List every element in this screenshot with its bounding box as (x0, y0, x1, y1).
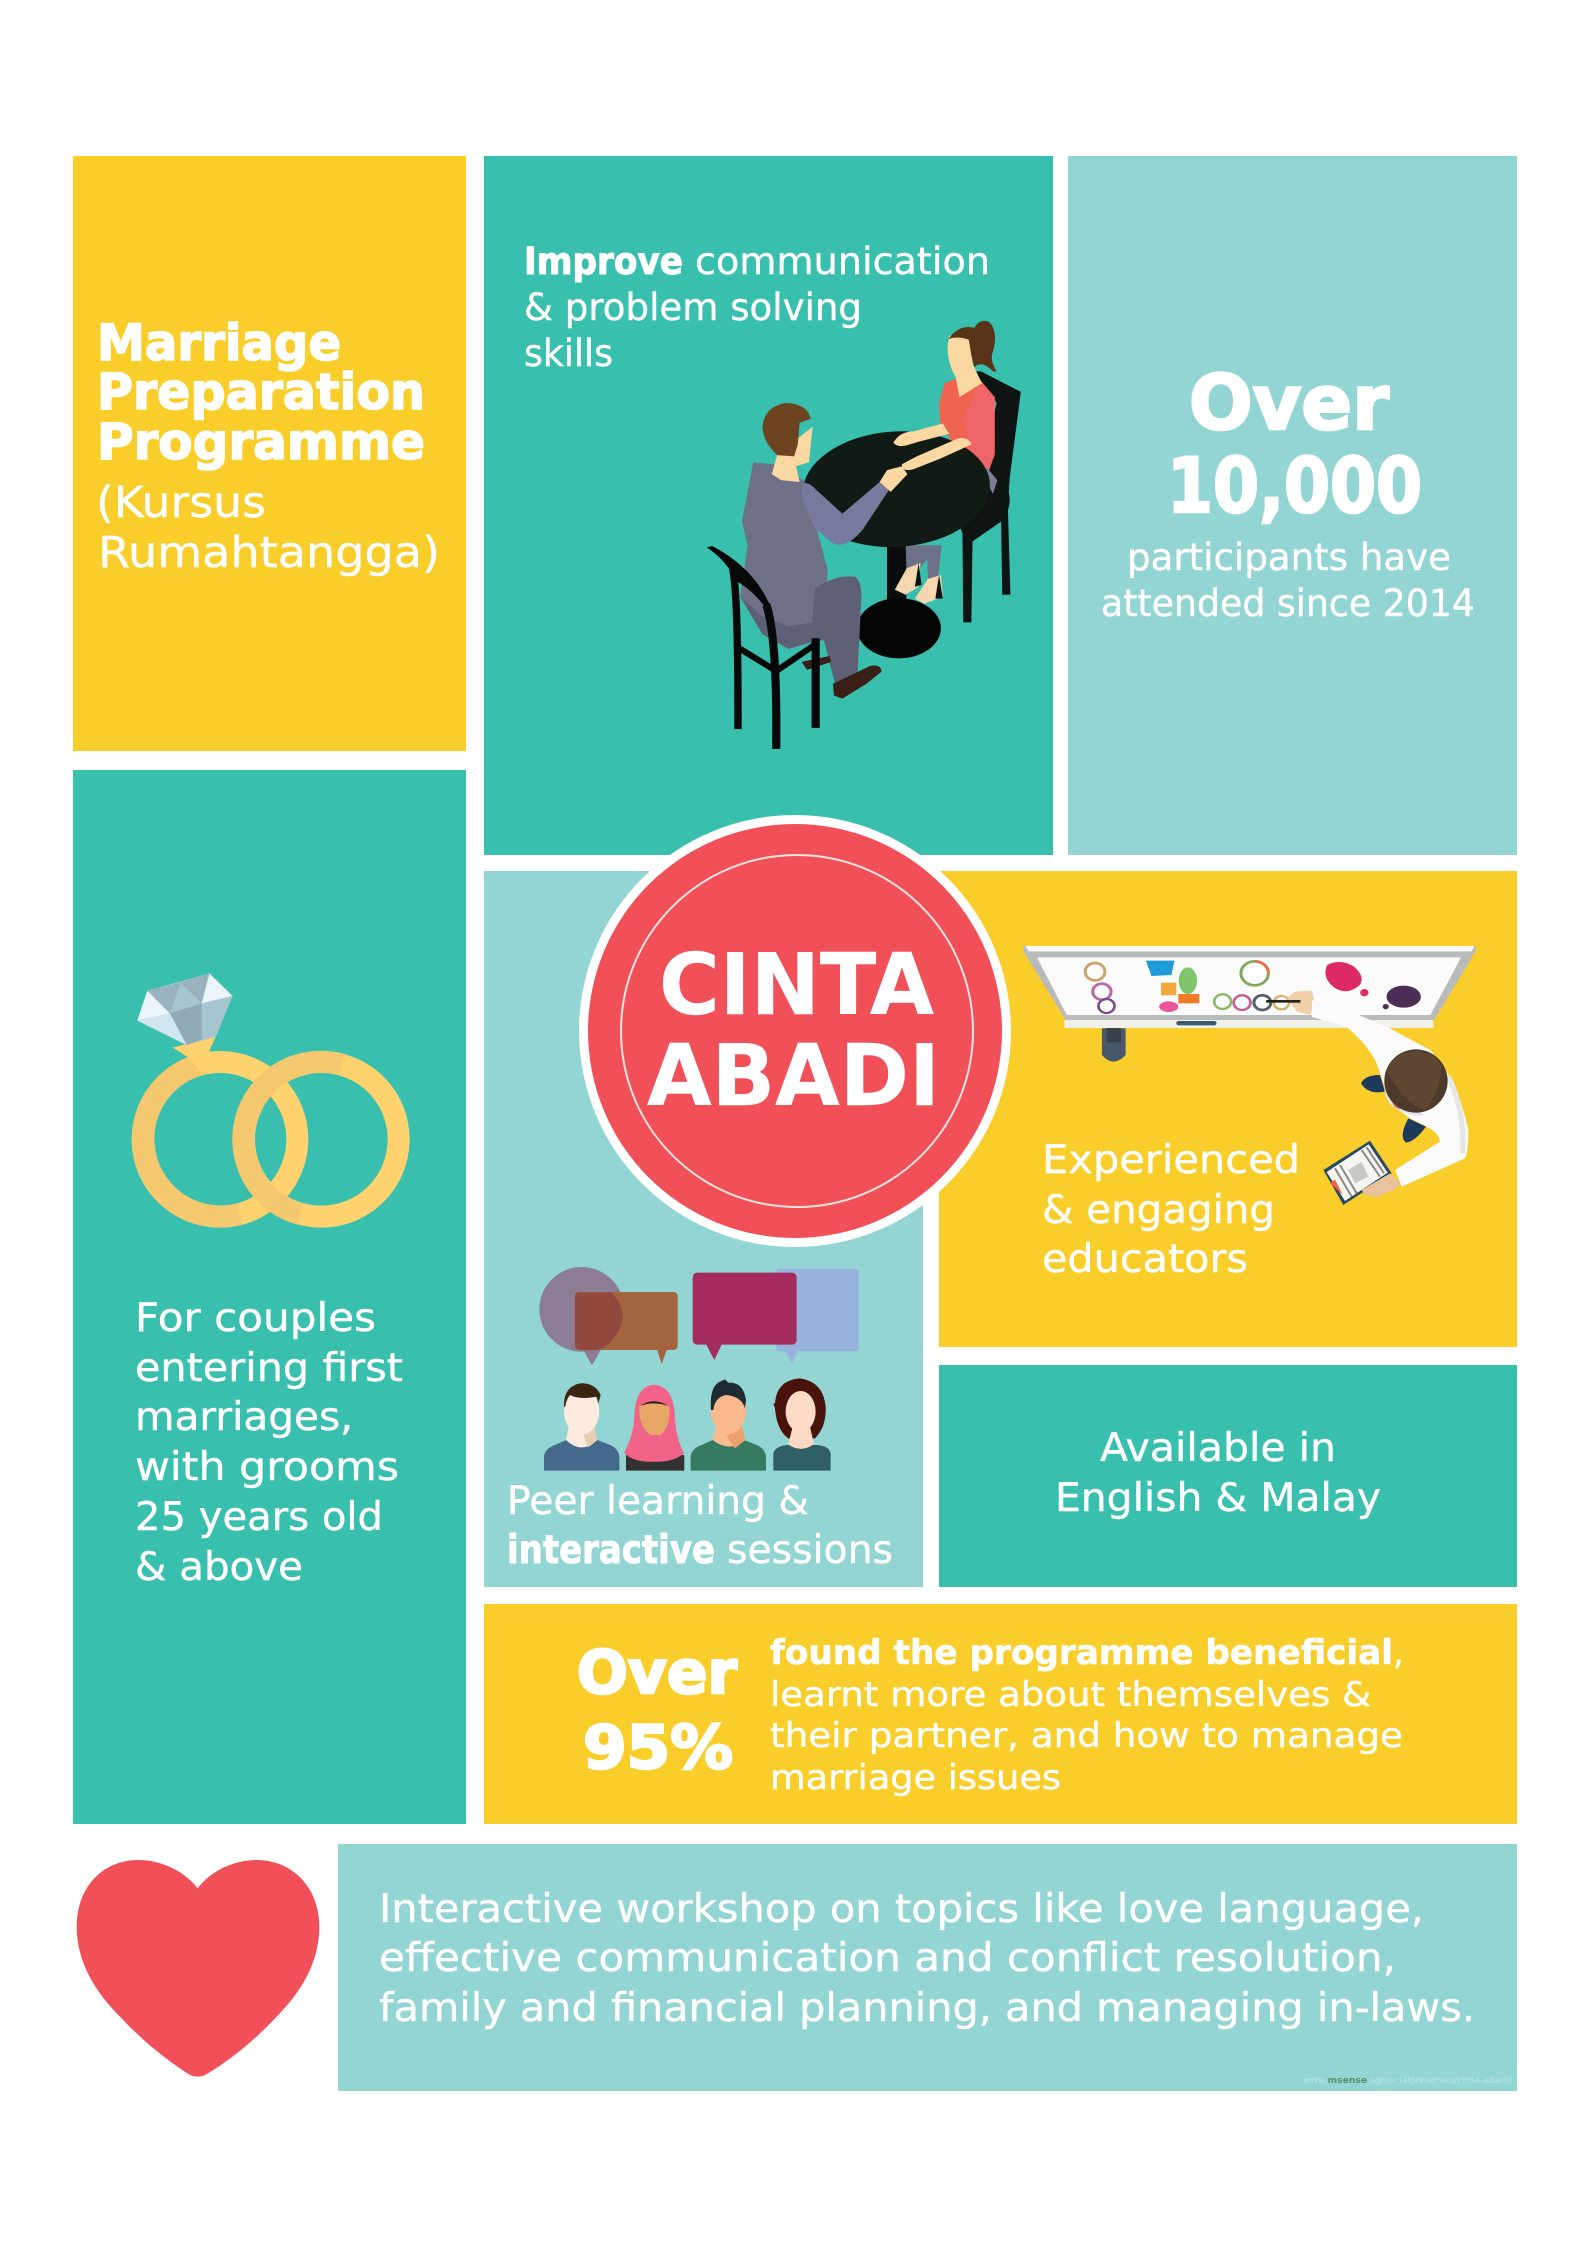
person four (773, 1378, 831, 1471)
woman's chair (959, 371, 1021, 622)
title: cinta abadi (647, 936, 940, 1126)
text: workshop topics: Interactive workshop on topics like love language, (379, 1887, 1424, 1932)
text: source url: www.msense.sg/socialpreservcs/cinta-abadi/ (1303, 2076, 1513, 2086)
text: languages available: English & Malay (1055, 1476, 1381, 1521)
text: educators: educators (1042, 1237, 1248, 1282)
title: cinta abadi: ABADI (647, 1027, 940, 1126)
table top (800, 426, 993, 552)
text: improve communication (524, 240, 990, 375)
badge: cinta abadi (579, 815, 1011, 1247)
text: improve communication: skills (524, 332, 613, 375)
woman's legs and heels (906, 545, 942, 579)
text: benefit description: found the programme beneficial (770, 1633, 1393, 1673)
person one (544, 1383, 619, 1471)
man shoes (833, 665, 881, 699)
stat: over 95%: Over (577, 1638, 737, 1708)
woman body (939, 377, 995, 472)
text: eligibility: 25 years old (135, 1495, 383, 1540)
panel: communication skills (484, 156, 1053, 855)
teacher (1312, 1000, 1468, 1205)
text: eligibility: & above (135, 1545, 303, 1590)
stat: over 10,000: 10,000 (1167, 441, 1422, 530)
icon: heart (77, 1860, 319, 2077)
icon: wedding rings (137, 973, 399, 1217)
text: eligibility: For couples (135, 1296, 376, 1341)
text: educators (1042, 1138, 1300, 1282)
text: benefit description: their partner, and how to manage (770, 1716, 1403, 1756)
man's chair (707, 546, 816, 749)
text: educators: Experienced (1042, 1138, 1300, 1183)
text: benefit description (770, 1633, 1404, 1798)
text: participants have attended: attended since 2014 (1101, 582, 1475, 625)
stat: over 95%: 95% (583, 1713, 733, 1783)
panel: eligibility (73, 770, 466, 1824)
text: benefit description: , (1393, 1633, 1404, 1673)
text: educators: & engaging (1042, 1188, 1275, 1233)
text: benefit description: marriage issues (770, 1758, 1061, 1798)
icon: speech bubbles and people (539, 1267, 859, 1471)
table stem and base (887, 541, 906, 601)
text: languages available (1055, 1426, 1381, 1521)
heading: programme name: Preparation (97, 363, 425, 421)
text: peer learning: Peer learning & (507, 1479, 809, 1524)
text: benefit description: learnt more about themselves & (770, 1675, 1371, 1715)
stat: over 95% (577, 1638, 737, 1783)
icon: couple at table (707, 321, 1021, 749)
stat: over 10,000: Over (1189, 358, 1389, 447)
text: workshop topics: effective communication and conflict resolution, (379, 1936, 1396, 1981)
panel: benefit statistic (484, 1604, 1517, 1824)
panel: workshop topics (338, 1844, 1517, 2091)
text: eligibility: with grooms (135, 1445, 399, 1490)
text: workshop topics: family and financial planning, and managing in-laws. (379, 1986, 1475, 2031)
title: cinta abadi: CINTA (659, 936, 934, 1035)
person three (691, 1379, 766, 1471)
panel: educators (939, 871, 1517, 1347)
heading: programme name: (Kursus (96, 478, 266, 528)
man body (740, 462, 828, 649)
heading: programme name: Marriage (97, 314, 341, 372)
text: eligibility: marriages, (135, 1395, 353, 1440)
panel: peer learning (484, 871, 923, 1587)
text: improve communication: communication (695, 240, 990, 283)
panel: participants statistic (1068, 156, 1517, 855)
text: eligibility: entering first (135, 1346, 403, 1391)
icon: teacher at whiteboard (1024, 946, 1475, 1205)
heading: programme name: Rumahtangga) (98, 528, 440, 578)
text: improve communication: & problem solving (524, 286, 862, 329)
man hand (880, 466, 907, 492)
stat: over 10,000 (1167, 358, 1422, 530)
text: peer learning: sessions (727, 1528, 893, 1573)
woman arms (893, 424, 949, 446)
text: languages available: Available in (1100, 1426, 1336, 1471)
text: peer learning: interactive (507, 1528, 715, 1573)
text: participants have attended: participants have (1127, 536, 1451, 579)
person two: hijab (624, 1385, 684, 1471)
text: workshop topics (379, 1887, 1475, 2031)
text: participants have attended (1101, 536, 1475, 625)
woman head and hair (948, 336, 982, 397)
text: peer learning (507, 1479, 893, 1573)
whiteboard (1024, 946, 1475, 1062)
heading: programme name (96, 314, 440, 578)
text: improve communication: Improve (524, 240, 683, 283)
panel: programme title (73, 156, 466, 751)
man head (772, 427, 813, 482)
text: eligibility (135, 1296, 403, 1590)
panel: languages (939, 1365, 1517, 1587)
heading: programme name: Programme (97, 413, 425, 471)
man arm (801, 482, 889, 545)
speech bubbles (539, 1267, 859, 1365)
man legs (811, 576, 861, 684)
